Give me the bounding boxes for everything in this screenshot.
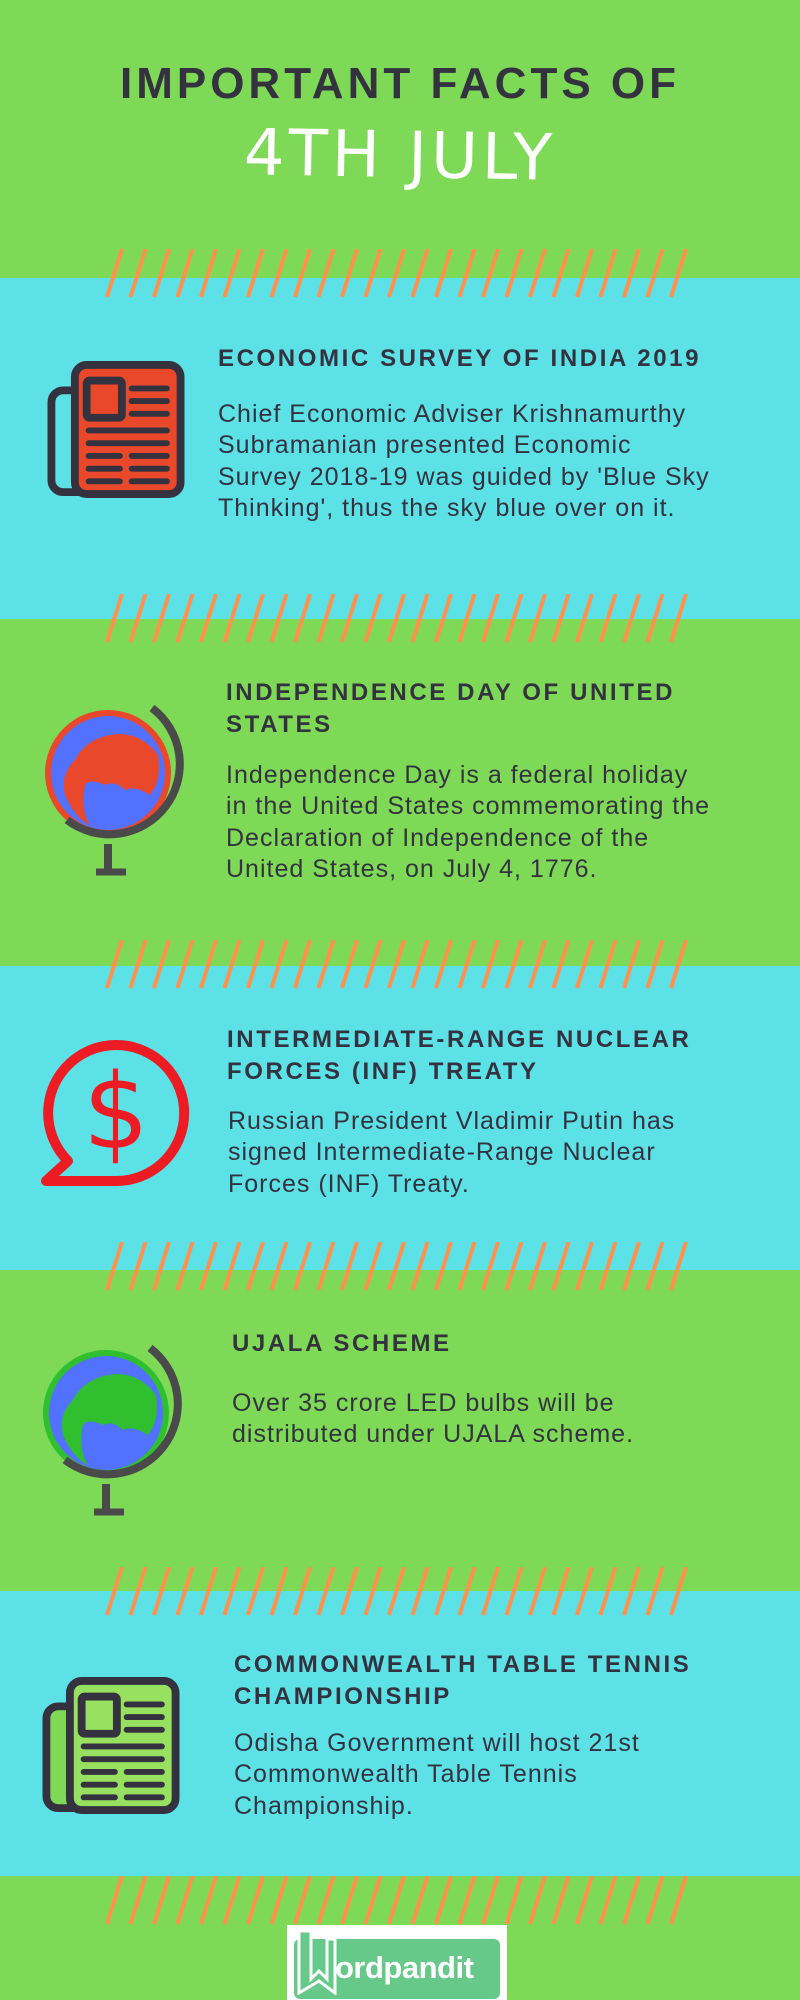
body 2: United States, on July 4, 1776.: [226, 855, 598, 883]
heading 1: ECONOMIC SURVEY OF INDIA 2019: [218, 345, 701, 372]
body 5: Championship.: [234, 1792, 414, 1820]
body 2: [226, 761, 710, 883]
heading 5: COMMONWEALTH TABLE TENNIS: [234, 1651, 691, 1678]
icon: globe green: [43, 1344, 182, 1516]
body 5: Odisha Government will host 21st: [234, 1729, 640, 1757]
icon: newspaper red: [48, 361, 184, 498]
body 4: distributed under UJALA scheme.: [232, 1420, 634, 1448]
icon: globe red: [45, 704, 184, 876]
body 2: Declaration of Independence of the: [226, 824, 649, 852]
heading 2: INDEPENDENCE DAY OF UNITED: [226, 679, 675, 706]
icon: newspaper green: [42, 1677, 180, 1814]
body 2: in the United States commemorating the: [226, 792, 710, 820]
body 1: Chief Economic Adviser Krishnamurthy: [218, 400, 686, 428]
heading 4: UJALA SCHEME: [232, 1330, 452, 1357]
body 1: Thinking', thus the sky blue over on it.: [218, 494, 676, 522]
body 1: [218, 400, 710, 522]
body 3: Russian President Vladimir Putin has: [228, 1107, 675, 1135]
body 2: Independence Day is a federal holiday: [226, 761, 688, 789]
body 4: [232, 1389, 634, 1448]
heading 3: FORCES (INF) TREATY: [227, 1058, 539, 1085]
heading 5: CHAMPIONSHIP: [234, 1683, 452, 1710]
icon: dollar speech bubble: $: [83, 1051, 149, 1173]
subtitle: 4th july: 4TH JULY: [243, 116, 557, 196]
body 5: Commonwealth Table Tennis: [234, 1760, 578, 1788]
body 1: Survey 2018-19 was guided by 'Blue Sky: [218, 463, 710, 491]
body 5: [234, 1729, 640, 1820]
body 4: Over 35 crore LED bulbs will be: [232, 1389, 615, 1417]
body 1: Subramanian presented Economic: [218, 431, 632, 459]
body 3: signed Intermediate-Range Nuclear: [228, 1138, 656, 1166]
heading 2: [226, 679, 675, 738]
heading 5: [234, 1651, 691, 1710]
body 3: [228, 1107, 675, 1198]
logo: wordpandit: ordpandit: [335, 1950, 473, 1985]
title: IMPORTANT FACTS OF: [120, 59, 680, 108]
heading 2: STATES: [226, 711, 333, 738]
heading 3: INTERMEDIATE-RANGE NUCLEAR: [227, 1026, 691, 1053]
body 3: Forces (INF) Treaty.: [228, 1170, 470, 1198]
icon: dollar speech bubble: [41, 1040, 190, 1186]
logo: wordpandit: [287, 1925, 507, 2000]
heading 3: [227, 1026, 691, 1085]
